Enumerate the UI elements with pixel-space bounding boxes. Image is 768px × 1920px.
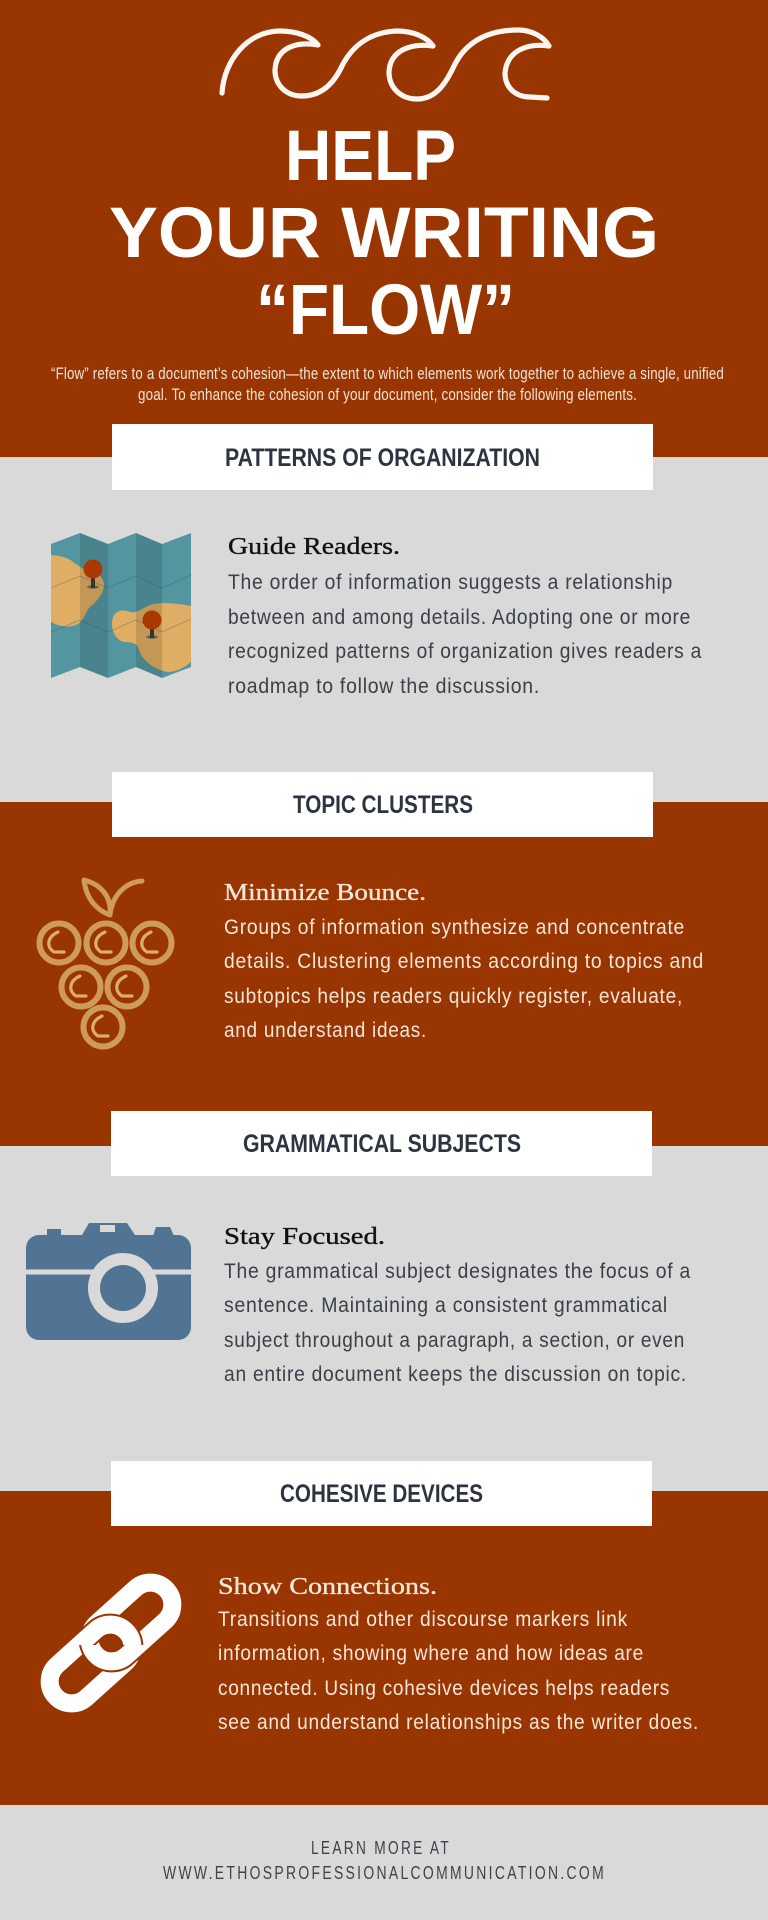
text block: guide readers <box>228 534 702 698</box>
panel: patterns of organization <box>0 424 768 802</box>
heading box: cohesive devices: COHESIVE DEVICES <box>280 1480 483 1508</box>
text block: stay focused: subject throughout a paragraph, a section, or even <box>224 1329 685 1352</box>
title: HELP <box>285 117 456 196</box>
panel: grammatical subjects <box>0 1111 768 1491</box>
text block: guide readers: Guide Readers. <box>228 534 400 560</box>
text block: guide readers: The order of information suggests a relationship <box>228 571 673 594</box>
text block: guide readers: recognized patterns of organization gives readers a <box>228 640 702 663</box>
text block: minimize bounce: and understand ideas. <box>224 1019 427 1042</box>
text block: minimize bounce: Minimize Bounce. <box>224 880 426 906</box>
text block: show connections <box>218 1574 699 1734</box>
text block: stay focused: an entire document keeps the discussion on topic. <box>224 1363 687 1386</box>
text block: stay focused: The grammatical subject designates the focus of a <box>224 1260 691 1283</box>
footer text: LEARN MORE AT <box>311 1838 451 1858</box>
text block: show connections: Show Connections. <box>218 1574 437 1600</box>
panel: footer <box>0 1805 768 1920</box>
text block: minimize bounce: details. Clustering elements according to topics and <box>224 950 704 973</box>
heading box: topic clusters <box>112 772 653 837</box>
text block: minimize bounce: Groups of information synthesize and concentrate <box>224 916 685 939</box>
heading box: grammatical subjects <box>111 1111 652 1176</box>
heading box: cohesive devices <box>111 1461 652 1526</box>
text block: minimize bounce <box>224 880 704 1042</box>
text block: show connections: Transitions and other discourse markers link <box>218 1608 628 1631</box>
text block: guide readers: between and among details. Adopting one or more <box>228 606 691 629</box>
text block: guide readers: roadmap to follow the discussion. <box>228 675 540 698</box>
text block: minimize bounce: subtopics helps readers quickly register, evaluate, <box>224 985 683 1008</box>
footer text: WWW.ETHOSPROFESSIONALCOMMUNICATION.COM <box>163 1863 606 1883</box>
panel: topic clusters <box>0 772 768 1146</box>
text block: stay focused <box>224 1224 691 1386</box>
title <box>109 117 659 350</box>
icon: camera <box>26 1223 191 1340</box>
text block: stay focused: sentence. Maintaining a consistent grammatical <box>224 1294 668 1317</box>
heading box: patterns of organization <box>112 424 653 490</box>
icon: chain link <box>41 1574 181 1712</box>
heading box: grammatical subjects: GRAMMATICAL SUBJECTS <box>243 1130 521 1158</box>
icon: waves <box>222 30 549 99</box>
intro text <box>51 364 724 404</box>
text block: show connections: connected. Using cohesive devices helps readers <box>218 1677 670 1700</box>
footer text <box>163 1838 606 1883</box>
panel: header <box>0 0 768 457</box>
heading box: patterns of organization: PATTERNS OF ORGANIZATION <box>225 444 540 472</box>
text block: show connections: see and understand relationships as the writer does. <box>218 1711 699 1734</box>
title: “FLOW” <box>256 271 515 350</box>
text block: show connections: information, showing where and how ideas are <box>218 1642 644 1665</box>
intro text: goal. To enhance the cohesion of your document, consider the following elements. <box>138 385 637 404</box>
icon: map <box>51 533 191 678</box>
text block: stay focused: Stay Focused. <box>224 1224 385 1250</box>
panel: cohesive devices <box>0 1461 768 1805</box>
heading box: topic clusters: TOPIC CLUSTERS <box>293 791 473 819</box>
title: YOUR WRITING <box>109 194 659 273</box>
icon: grapes <box>40 880 172 1046</box>
